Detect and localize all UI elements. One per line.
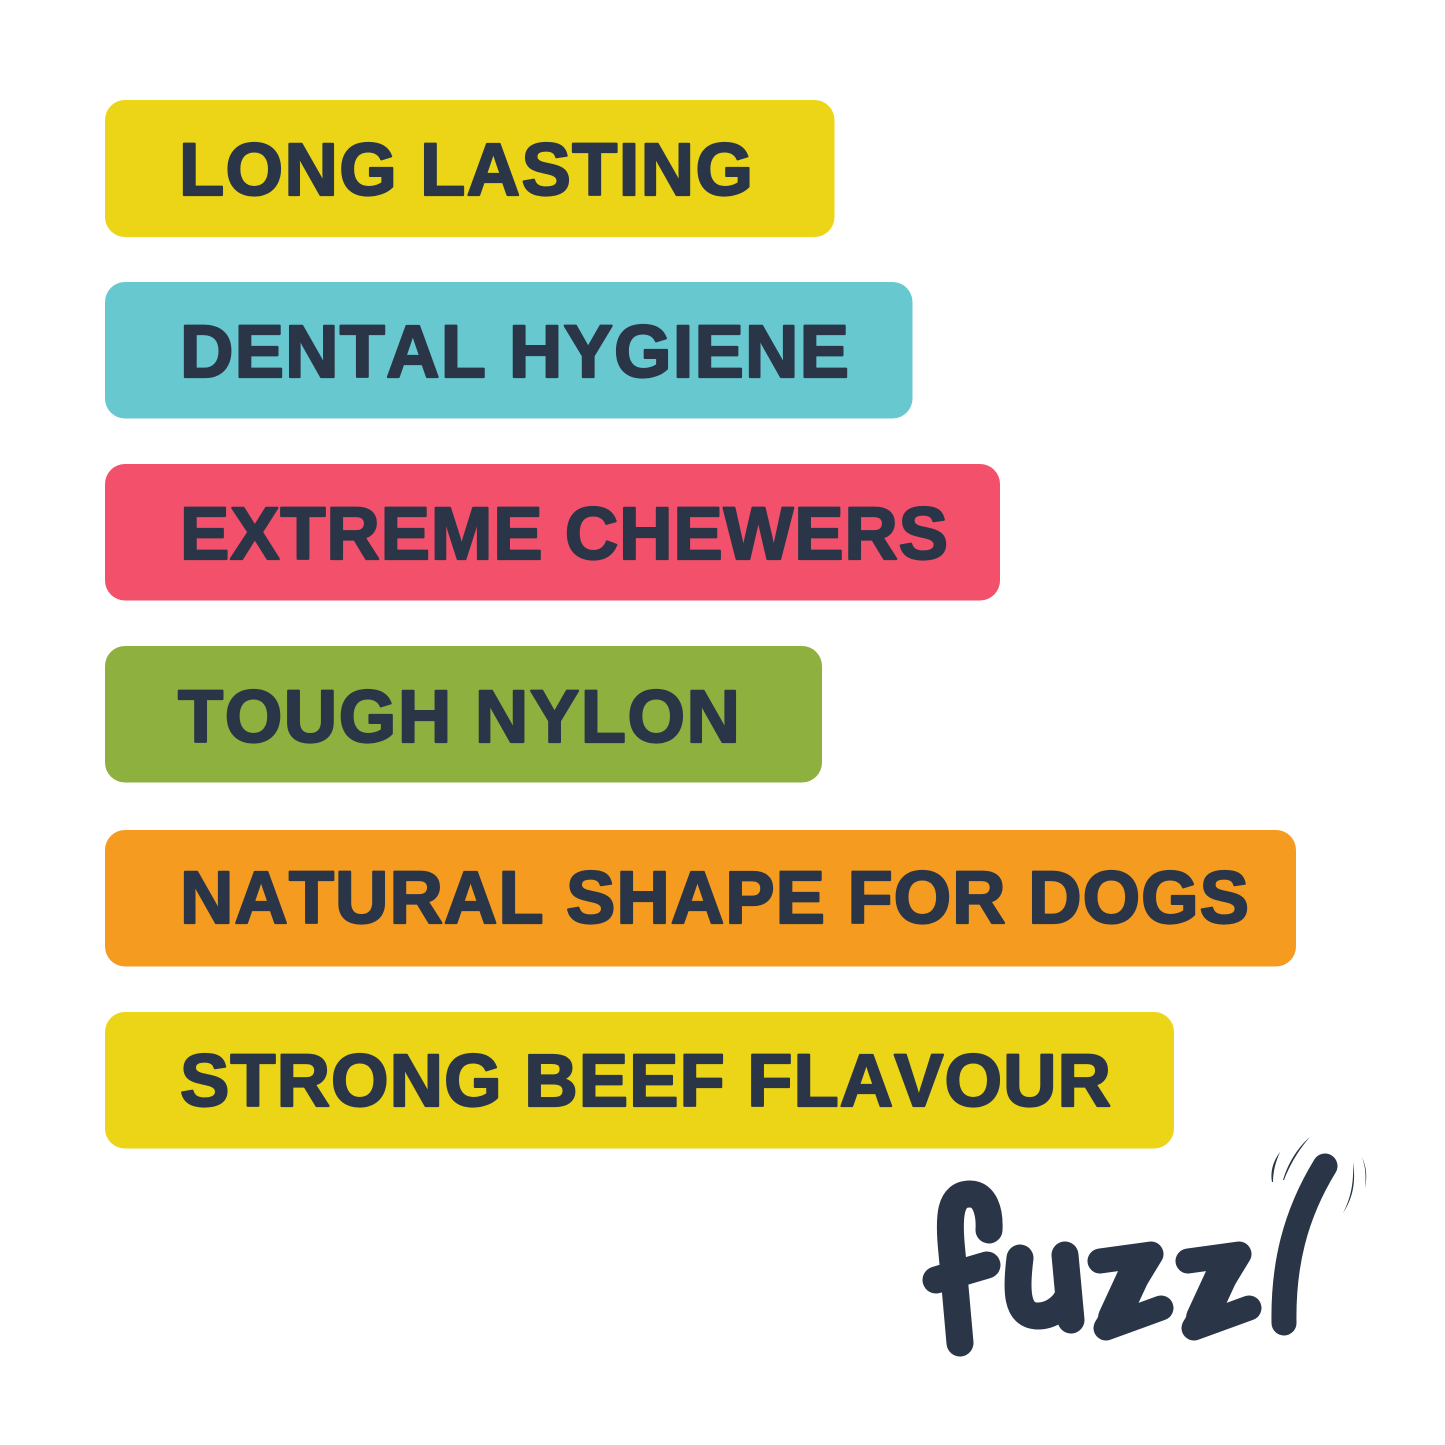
label: tough nylon	[105, 646, 822, 782]
logo letter: l	[1284, 1166, 1325, 1323]
label: tough nylon: TOUGH NYLON	[178, 675, 740, 758]
label: natural shape for dogs	[105, 830, 1296, 966]
label: long lasting: LONG LASTING	[179, 128, 753, 211]
label: dental hygiene: DENTAL HYGIENE	[180, 310, 849, 393]
label: strong beef flavour	[105, 1012, 1174, 1148]
logo letter: u	[1018, 1255, 1071, 1320]
logo: fuzzl	[936, 1137, 1366, 1343]
motion lines	[1271, 1137, 1366, 1213]
label: long lasting	[105, 100, 834, 237]
label: extreme chewers: EXTREME CHEWERS	[180, 492, 948, 575]
label: extreme chewers	[105, 464, 1000, 600]
label: natural shape for dogs: NATURAL SHAPE FOR DOGS	[180, 856, 1249, 939]
logo letter: z	[1100, 1254, 1161, 1328]
label: dental hygiene	[105, 282, 912, 418]
logo letter: z	[1188, 1254, 1249, 1328]
logo letter: f	[936, 1194, 989, 1343]
label: strong beef flavour: STRONG BEEF FLAVOUR	[180, 1039, 1111, 1122]
